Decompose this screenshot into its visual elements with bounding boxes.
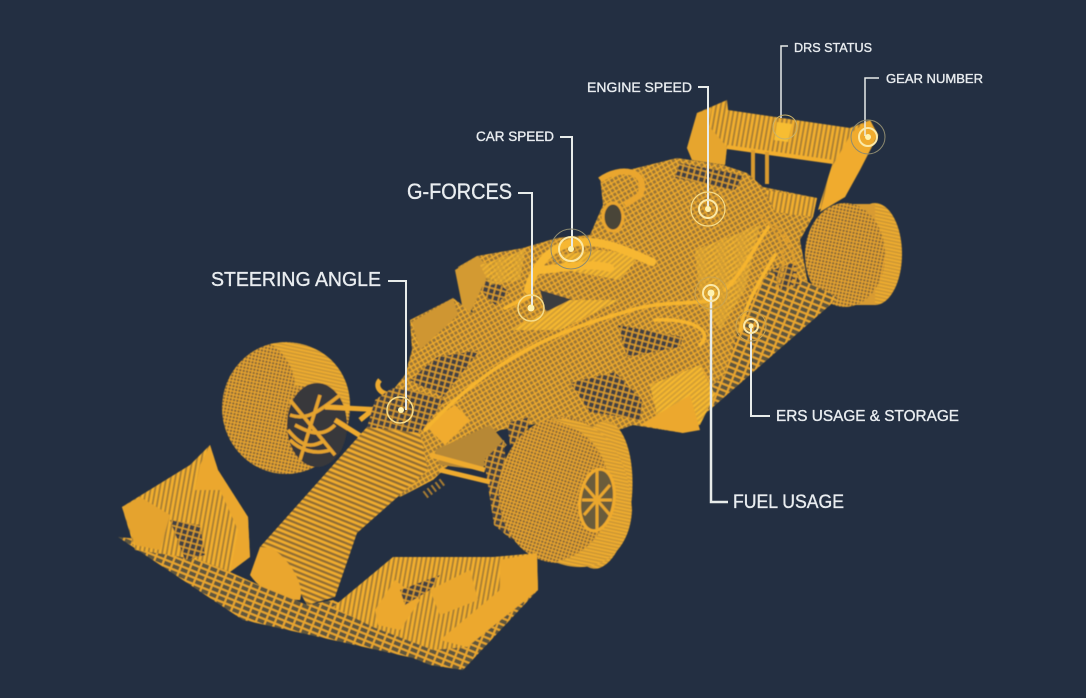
- callout: car speed: CAR SPEED: [476, 128, 554, 144]
- callout: engine speed: [587, 79, 725, 226]
- callout: drs status: [773, 40, 872, 139]
- callout: fuel usage: FUEL USAGE: [733, 492, 844, 513]
- front right wheel: [484, 411, 638, 572]
- suspension dots: [425, 480, 445, 495]
- wheel hub: [576, 467, 618, 533]
- callout: car speed: [476, 128, 591, 269]
- callout: engine speed: ENGINE SPEED: [587, 79, 692, 95]
- callout: ers usage and storage: [736, 311, 959, 425]
- rear wheel: [805, 203, 902, 307]
- car wireframe: [118, 100, 902, 670]
- callout: steering angle: STEERING ANGLE: [211, 269, 381, 291]
- sidepod intake and bright panels: [412, 225, 760, 470]
- nose cone: [260, 427, 428, 605]
- right flaps: [333, 553, 538, 650]
- nose tip: [250, 547, 301, 600]
- main body: [367, 158, 838, 497]
- front left wheel: [222, 342, 350, 474]
- left endplate: [122, 445, 250, 572]
- callout: gear number: [851, 71, 983, 154]
- front suspension: [325, 380, 490, 482]
- beam wing: [765, 190, 817, 217]
- callout: ers usage and storage: ERS USAGE & STORAGE: [776, 408, 959, 425]
- body highlight lines: [425, 225, 775, 430]
- callout: g-forces: G-FORCES: [407, 179, 512, 204]
- callout: fuel usage: [695, 277, 844, 513]
- front wing plate: [118, 537, 538, 670]
- halo: [528, 242, 652, 290]
- rear wing: [687, 100, 878, 212]
- airbox surround: [600, 172, 642, 205]
- airbox opening: [603, 203, 623, 231]
- callout: drs status: DRS STATUS: [794, 40, 872, 55]
- floor: [665, 265, 838, 433]
- callout: steering angle: [211, 269, 413, 423]
- callout: g-forces: [407, 179, 544, 321]
- dark cockpit and mesh patches: [410, 262, 800, 445]
- callout: gear number: GEAR NUMBER: [886, 71, 983, 86]
- engine cover top mesh: [675, 163, 743, 190]
- steering section: [367, 388, 445, 433]
- rear suspension: [760, 215, 795, 290]
